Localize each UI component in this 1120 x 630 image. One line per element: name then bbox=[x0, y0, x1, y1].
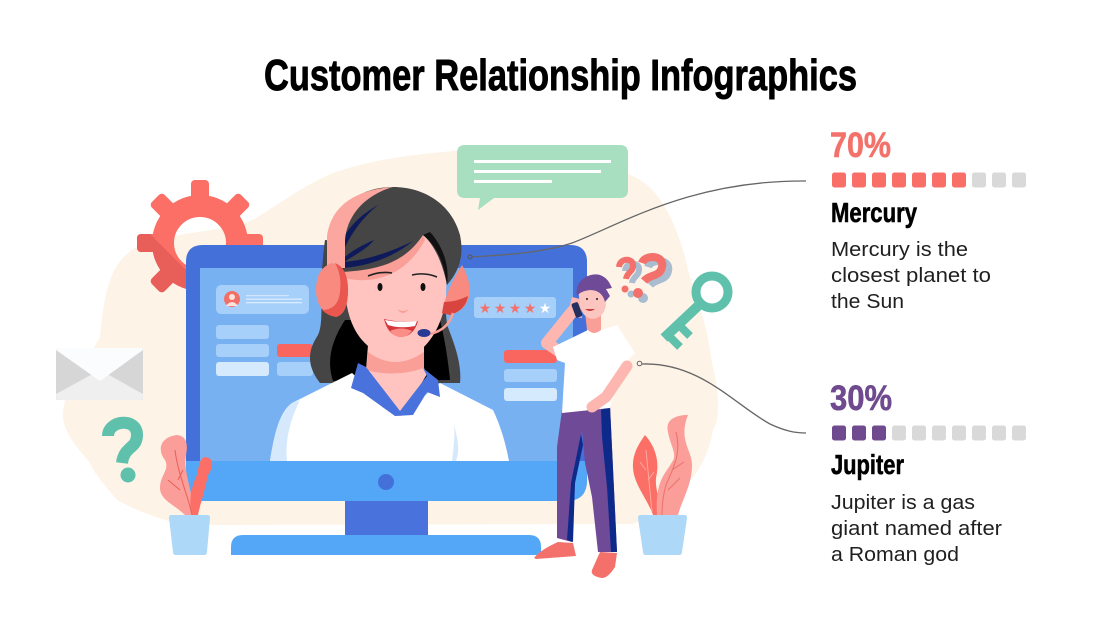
description: the Sun bbox=[831, 291, 904, 313]
description bbox=[831, 492, 1002, 566]
phone bbox=[571, 302, 583, 318]
background blob bbox=[63, 150, 718, 525]
left form rows bbox=[216, 325, 313, 376]
left shoe bbox=[534, 542, 576, 559]
monitor bbox=[186, 245, 587, 555]
coral leaf bbox=[633, 435, 662, 515]
icon: key bbox=[664, 276, 728, 347]
monitor stand bbox=[345, 500, 428, 536]
description: Jupiter is a gas bbox=[831, 492, 975, 514]
heading: Mercury bbox=[831, 197, 917, 228]
rating card with stars: ★ bbox=[479, 301, 491, 317]
heading: Jupiter bbox=[831, 449, 904, 480]
rating card with stars: ★ bbox=[524, 301, 536, 317]
fringe hair bbox=[335, 187, 461, 285]
icon: red and grey question marks bbox=[619, 257, 668, 303]
right potted plant bbox=[633, 415, 692, 555]
coral leaf bbox=[190, 457, 212, 515]
eyes bbox=[378, 283, 382, 291]
neck bbox=[585, 312, 601, 333]
head bbox=[578, 288, 606, 319]
pot bbox=[638, 515, 687, 555]
description: closest planet to bbox=[831, 265, 991, 287]
man hair bbox=[577, 274, 612, 302]
monitor base bbox=[231, 535, 541, 555]
microphone bbox=[430, 313, 453, 334]
description: Mercury is the bbox=[831, 239, 968, 261]
description: a Roman god bbox=[831, 544, 959, 566]
back hair bbox=[310, 240, 460, 383]
title: Customer Relationship Infographics bbox=[264, 51, 857, 100]
progress squares bbox=[832, 426, 1026, 440]
face details bbox=[586, 298, 588, 300]
right shoe bbox=[592, 552, 617, 578]
progress squares bbox=[832, 172, 1026, 188]
headset bbox=[327, 187, 393, 268]
description: giant named after bbox=[831, 518, 1002, 540]
pink leaf bbox=[657, 415, 692, 515]
profile card bbox=[216, 285, 309, 314]
pink leaf bbox=[160, 435, 195, 515]
percentage: 70% bbox=[830, 126, 891, 165]
left potted plant bbox=[160, 435, 212, 555]
stat: Mercury bbox=[830, 126, 1026, 313]
man on phone bbox=[534, 274, 635, 578]
stat: Jupiter bbox=[830, 379, 1026, 566]
right form rows bbox=[504, 350, 557, 401]
face bbox=[344, 220, 447, 358]
shirt bbox=[270, 373, 509, 461]
right arm bbox=[592, 366, 627, 407]
infographic canvas bbox=[56, 58, 1026, 578]
woman with headset bbox=[270, 187, 509, 461]
neck bbox=[366, 345, 427, 416]
trousers bbox=[557, 406, 617, 552]
rating card with stars: ★ bbox=[494, 301, 506, 317]
pot bbox=[169, 515, 210, 555]
icon: envelope bbox=[56, 348, 143, 400]
speech bubble bbox=[457, 145, 628, 210]
shirt bbox=[553, 325, 635, 413]
percentage: 30% bbox=[830, 379, 892, 418]
rating card with stars: ★ bbox=[539, 301, 551, 317]
nose bbox=[397, 309, 409, 313]
connector line to Jupiter bbox=[637, 361, 806, 433]
rating card with stars bbox=[474, 297, 556, 318]
connector line to Mercury bbox=[468, 181, 806, 259]
fringe shadow bbox=[344, 225, 425, 280]
rating card with stars: ★ bbox=[509, 301, 521, 317]
monitor screen bbox=[200, 268, 573, 463]
icon: gear bbox=[137, 180, 263, 294]
eyebrows bbox=[368, 272, 437, 277]
raised arm bbox=[547, 312, 572, 352]
description bbox=[831, 239, 991, 313]
mouth bbox=[384, 319, 418, 337]
monitor chin bbox=[186, 461, 587, 501]
fringe streaks bbox=[341, 205, 413, 268]
icon: teal question mark bbox=[108, 423, 137, 482]
collar bbox=[351, 363, 440, 416]
monitor frame bbox=[186, 245, 587, 501]
